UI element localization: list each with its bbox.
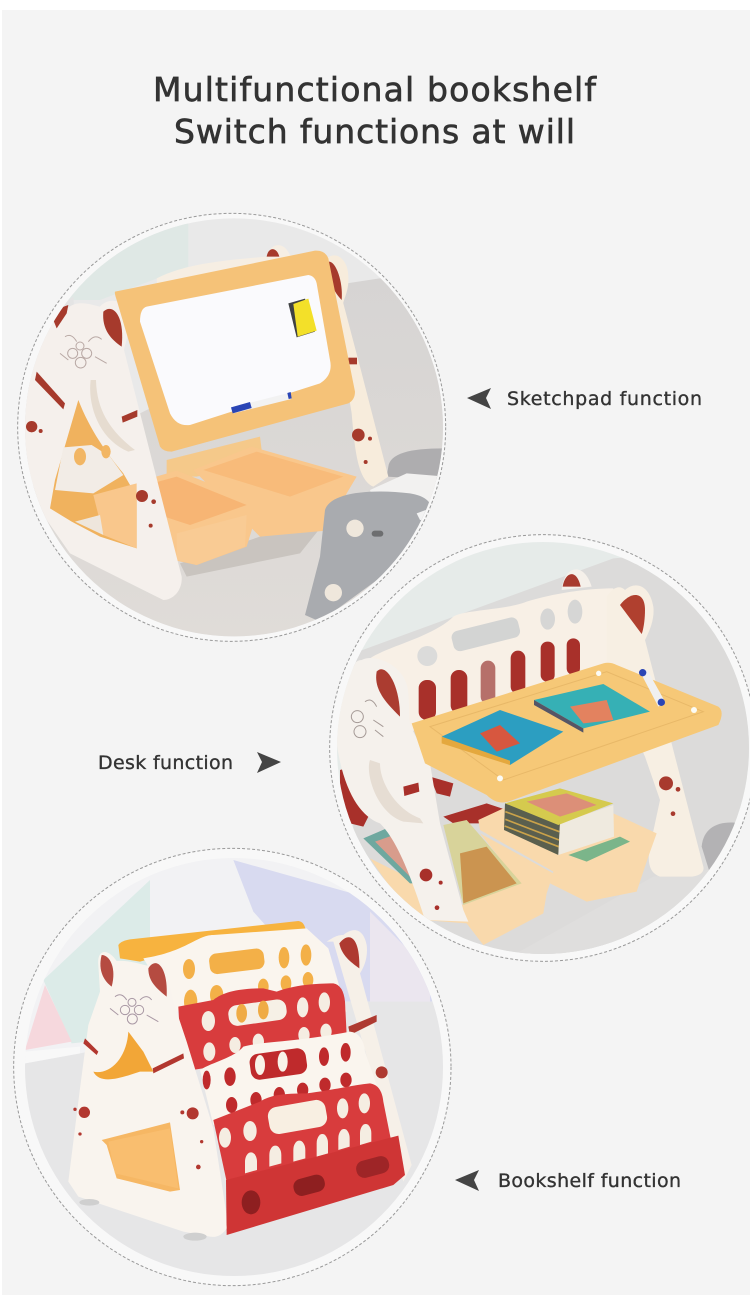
upper red board: [178, 983, 347, 1072]
back leg: [157, 245, 388, 487]
desk top: [412, 663, 722, 802]
right bin with book stack: [478, 788, 657, 902]
whiteboard frame: [115, 251, 355, 452]
right leg: [607, 585, 704, 877]
back panel: [370, 569, 613, 737]
label: desk: Desk function: [98, 752, 233, 774]
panel: bookshelf photo circle: [0, 845, 467, 1292]
back gray piece: [702, 822, 735, 870]
marker: [231, 392, 292, 413]
book on desk: teal: [534, 684, 650, 733]
label: sketchpad: Sketchpad function: [507, 388, 702, 410]
red inner structure: [340, 770, 368, 827]
gray elephant board: [305, 491, 431, 622]
back gray piece: [370, 448, 442, 502]
left side panel: [25, 301, 182, 600]
top orange board: [118, 921, 306, 962]
lower cream board: [200, 1032, 377, 1125]
panel: desk photo circle: [320, 530, 750, 970]
arrow: pointing left: [467, 388, 491, 409]
left side panel: [68, 952, 227, 1237]
arrow: pointing left: [455, 1170, 479, 1191]
lower red board: [213, 1083, 391, 1182]
eraser: [288, 299, 317, 337]
title: Switch functions at will: [174, 112, 575, 151]
feet: [79, 1199, 207, 1241]
book on desk: blue: [442, 710, 563, 765]
front red bar: [226, 1136, 405, 1235]
left side panel: [337, 658, 468, 922]
orange back structure: [167, 437, 263, 477]
arrow: pointing right: [257, 752, 281, 773]
title: Multifunctional bookshelf: [153, 70, 597, 109]
left bin with books: [363, 818, 553, 945]
marker on desk: [639, 669, 665, 707]
right side panel: [327, 930, 412, 1182]
bins: [156, 450, 356, 565]
title: [153, 70, 597, 151]
panel: sketchpad photo circle: [17, 212, 446, 642]
back cream board: [143, 928, 347, 1014]
label: bookshelf: Bookshelf function: [498, 1170, 681, 1192]
